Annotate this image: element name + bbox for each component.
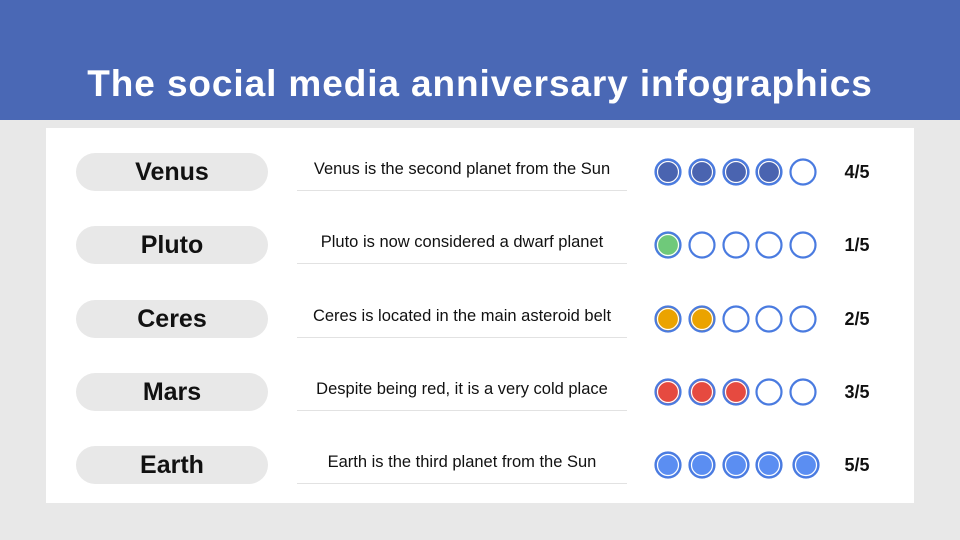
rating dots: Ceres [654, 305, 817, 333]
rating dots: Mars [654, 378, 817, 406]
description: Mars [297, 373, 627, 411]
label pill: Ceres: Ceres [137, 305, 207, 333]
description: Earth: Earth is the third planet from the Sun [328, 453, 596, 471]
label pill: Pluto: Pluto [141, 231, 203, 259]
description: Earth [297, 446, 627, 484]
header band [0, 0, 960, 120]
description: Venus [297, 153, 627, 191]
label pill: Mars: Mars [143, 378, 201, 406]
row: Ceres [76, 300, 870, 338]
label pill: Earth: Earth [140, 451, 204, 479]
score: Venus: 4/5 [844, 162, 870, 182]
score: Earth: 5/5 [844, 455, 870, 475]
label pill: Earth [76, 446, 268, 484]
description: Ceres: Ceres is located in the main asteroid belt [313, 307, 611, 325]
description: Pluto [297, 226, 627, 264]
title: The social media anniversary infographics [87, 63, 873, 104]
description: Pluto: Pluto is now considered a dwarf planet [321, 233, 603, 251]
score: Pluto: 1/5 [844, 235, 870, 255]
rating dots: Venus [654, 158, 817, 186]
label pill: Pluto [76, 226, 268, 264]
row: Mars [76, 373, 870, 411]
description: Venus: Venus is the second planet from the Sun [314, 160, 610, 178]
description: Ceres [297, 300, 627, 338]
label pill: Ceres [76, 300, 268, 338]
panel: white card [46, 128, 914, 503]
row: Venus [76, 153, 870, 191]
rating dots: Pluto [654, 231, 817, 259]
label pill: Venus [76, 153, 268, 191]
label pill: Venus: Venus [135, 158, 209, 186]
description: Mars: Despite being red, it is a very cold place [316, 380, 608, 398]
row: Earth [76, 446, 870, 484]
score: Mars: 3/5 [844, 382, 870, 402]
rating dots: Earth [654, 451, 820, 479]
score: Ceres: 2/5 [844, 309, 870, 329]
row: Pluto [76, 226, 870, 264]
label pill: Mars [76, 373, 268, 411]
